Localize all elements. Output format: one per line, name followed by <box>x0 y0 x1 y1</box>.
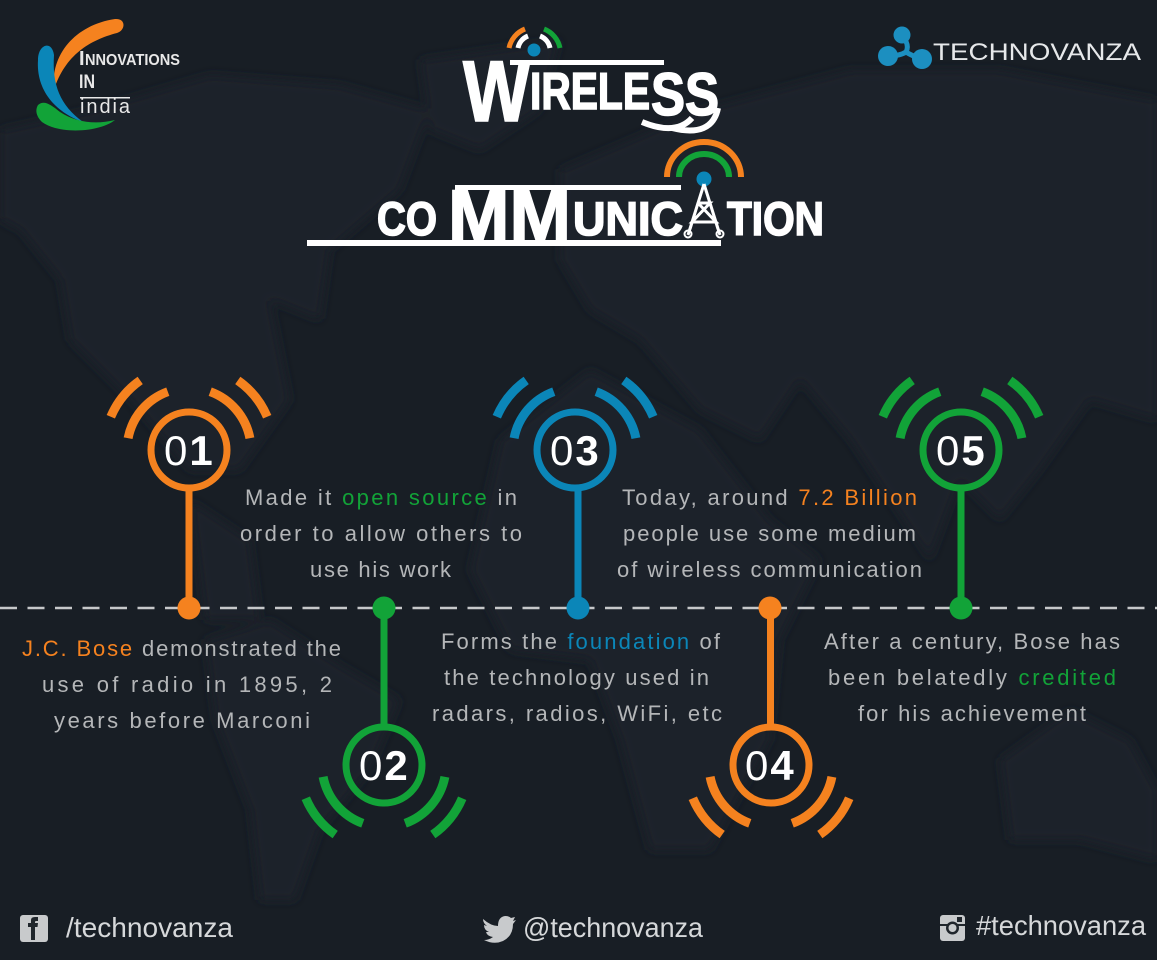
title: Wireless: IRELE <box>530 63 650 121</box>
node 01 <box>111 380 267 620</box>
text block 03: radars, radios, WiFi, etc <box>432 701 722 726</box>
title: Communication <box>307 142 824 257</box>
text block 01: use of radio in 1895, 2 <box>42 672 332 697</box>
node 03 <box>497 380 653 620</box>
logo: Innovations in India: I <box>79 48 85 70</box>
text block 02: Made it open source in <box>245 485 517 510</box>
logo: Innovations in India: india <box>80 96 131 118</box>
node 05 <box>883 380 1039 620</box>
footer: facebook: /technovanza <box>66 912 233 943</box>
node 04: 04 <box>745 742 796 789</box>
text block 02: use his work <box>310 557 452 582</box>
text block 01: years before Marconi <box>54 708 310 733</box>
node 02: 02 <box>359 742 410 789</box>
text block 01: J.C. Bose demonstrated the <box>22 636 341 661</box>
logo: Innovations in India <box>36 19 180 130</box>
icon: antenna tower <box>667 142 741 238</box>
node 03: 03 <box>550 427 601 474</box>
logo: Innovations in India: IN <box>79 72 95 93</box>
text block 04: people use some medium <box>623 521 916 546</box>
title: Communication: MM <box>448 176 571 257</box>
dashed timeline <box>0 607 1157 609</box>
text block 05: been belatedly credited <box>828 665 1116 690</box>
node 04 <box>693 596 849 835</box>
text block 05: for his achievement <box>858 701 1086 726</box>
footer: twitter: @technovanza <box>523 912 703 943</box>
node 01: 01 <box>164 427 215 474</box>
logo: Technovanza <box>878 26 1141 69</box>
text block 05: After a century, Bose has <box>824 629 1120 654</box>
text block 03: the technology used in <box>444 665 709 690</box>
title: Wireless: SS <box>651 61 719 128</box>
text block 03: Forms the foundation of <box>441 629 721 654</box>
text block 02 <box>240 485 522 582</box>
title: Wireless: W <box>463 44 531 140</box>
title: Communication: TION <box>727 192 824 245</box>
footer: instagram: #technovanza <box>976 910 1146 941</box>
text block 01 <box>22 636 341 733</box>
icon: wireless signal <box>509 29 560 56</box>
text block 04: Today, around 7.2 Billion <box>622 485 917 510</box>
text block 04: of wireless communication <box>617 557 922 582</box>
title: Wireless <box>463 29 719 140</box>
title: Communication: UNIC <box>573 192 683 245</box>
text block 05 <box>824 629 1120 726</box>
text block 03 <box>432 629 722 726</box>
title: Communication: CO <box>377 192 437 245</box>
node 05: 05 <box>936 427 987 474</box>
logo: Technovanza: TECHNOVANZA <box>933 39 1141 66</box>
node 02 <box>306 596 462 835</box>
text block 04 <box>617 485 922 582</box>
logo: Innovations in India: NNOVATIONS <box>85 52 180 69</box>
text block 02: order to allow others to <box>240 521 522 546</box>
